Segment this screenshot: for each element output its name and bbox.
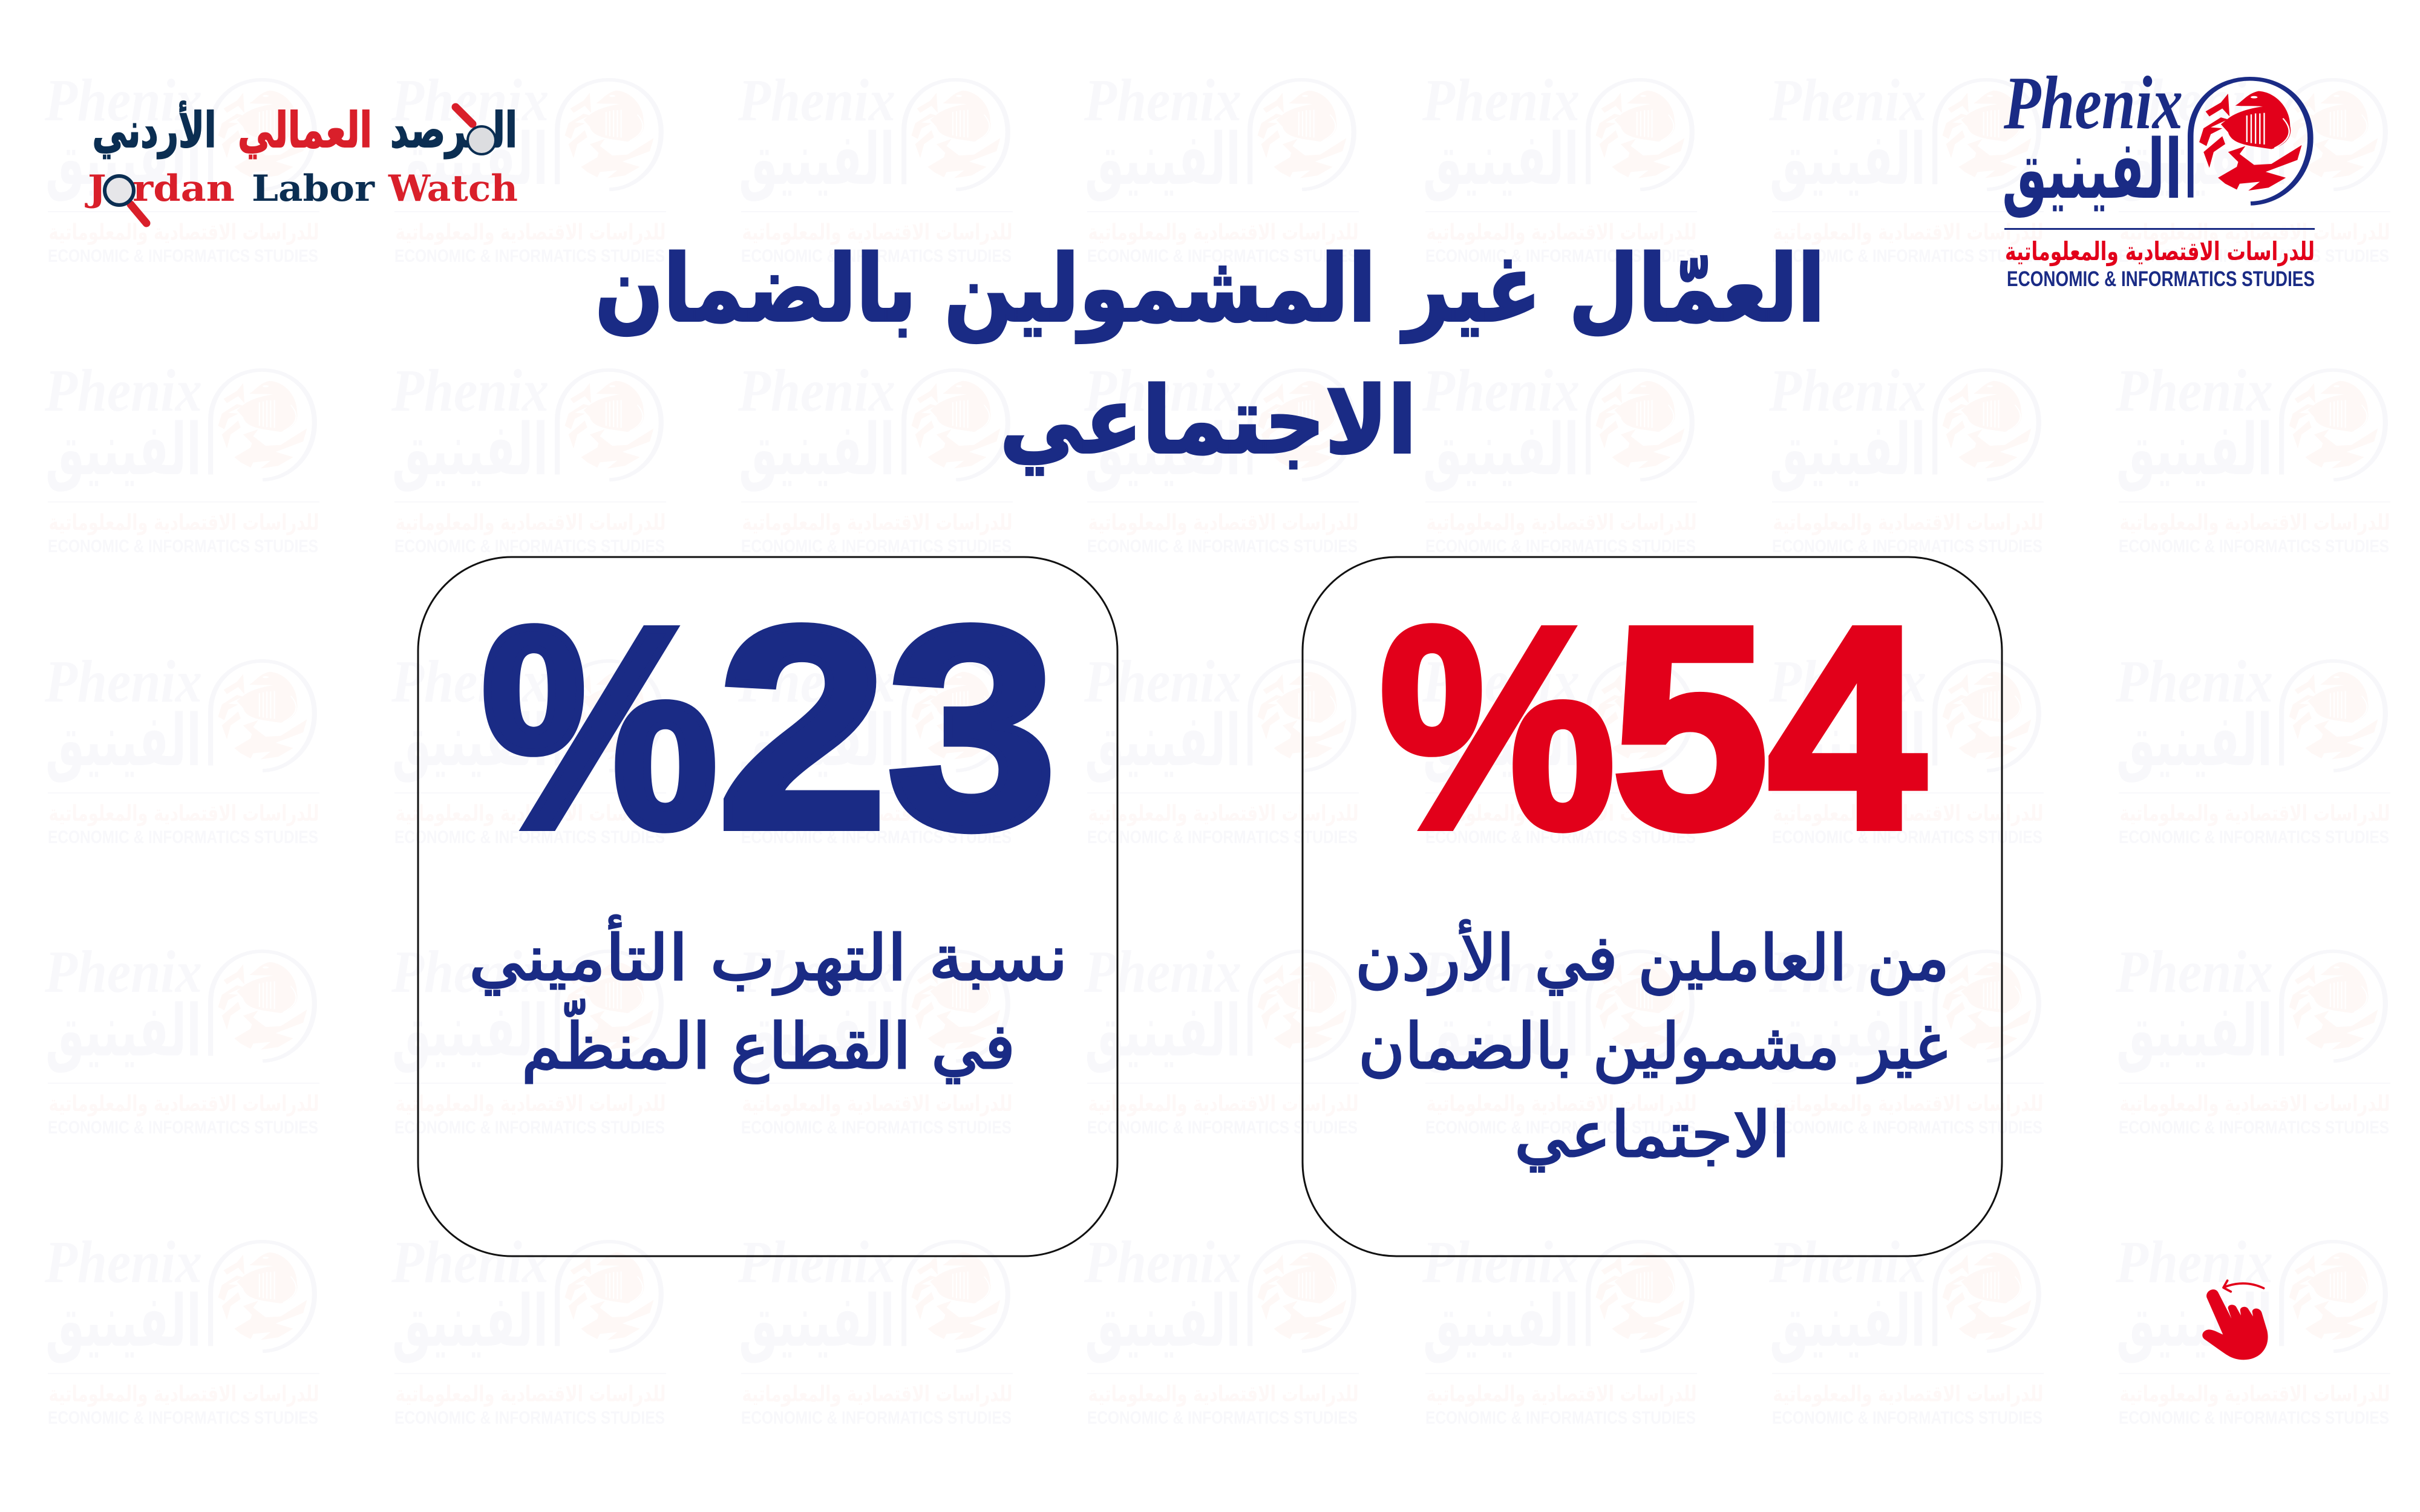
watermark pattern: للدراسات الاقتصادية والمعلوماتية xyxy=(1088,510,1359,535)
title: العمّال غير المشمولين بالضمان xyxy=(595,235,1825,343)
watermark pattern: للدراسات الاقتصادية والمعلوماتية xyxy=(48,801,319,826)
logo Arabic name: الأردني xyxy=(92,101,217,159)
watermark pattern: الفينيق xyxy=(739,408,895,492)
stat: 23 percent xyxy=(481,568,1057,888)
watermark pattern: Phenix xyxy=(1422,1228,1580,1295)
watermark pattern: Phenix xyxy=(391,938,549,1005)
watermark pattern: للدراسات الاقتصادية والمعلوماتية xyxy=(742,801,1013,826)
logo English name: Labor xyxy=(252,168,375,210)
watermark pattern: ECONOMIC & INFORMATICS STUDIES xyxy=(1772,1408,2042,1428)
watermark pattern: Phenix xyxy=(1768,357,1926,424)
stat: 23 percent: 23 xyxy=(718,568,1057,888)
watermark pattern: للدراسات الاقتصادية والمعلوماتية xyxy=(396,510,666,535)
watermark pattern: الفينيق xyxy=(1423,699,1579,783)
text: workers not covered xyxy=(1355,919,1949,1172)
watermark pattern: Phenix xyxy=(391,648,549,715)
watermark pattern: الفينيق xyxy=(739,117,895,201)
watermark pattern: الفينيق xyxy=(2116,408,2272,492)
watermark pattern: ECONOMIC & INFORMATICS STUDIES xyxy=(741,536,1012,556)
watermark pattern: Phenix xyxy=(737,648,895,715)
watermark pattern: للدراسات الاقتصادية والمعلوماتية xyxy=(48,1092,319,1116)
watermark pattern: الفينيق xyxy=(2116,1279,2272,1363)
watermark pattern: الفينيق xyxy=(1085,117,1241,201)
watermark pattern: Phenix xyxy=(44,1228,202,1295)
watermark pattern: Phenix xyxy=(391,67,549,134)
watermark pattern: ECONOMIC & INFORMATICS STUDIES xyxy=(394,1118,665,1138)
watermark pattern: الفينيق xyxy=(392,699,548,783)
watermark pattern: Phenix xyxy=(1768,648,1926,715)
watermark pattern: الفينيق xyxy=(45,989,201,1073)
watermark pattern: الفينيق xyxy=(739,989,895,1073)
watermark pattern: Phenix xyxy=(2115,357,2273,424)
watermark pattern: Phenix xyxy=(1422,938,1580,1005)
watermark pattern: للدراسات الاقتصادية والمعلوماتية xyxy=(1088,1382,1359,1407)
watermark pattern: Phenix xyxy=(1084,938,1241,1005)
watermark pattern: الفينيق xyxy=(1085,408,1241,492)
watermark pattern: ECONOMIC & INFORMATICS STUDIES xyxy=(48,827,318,847)
text: workers not covered: غير مشمولين بالضمان xyxy=(1358,1009,1947,1084)
logo Arabic name xyxy=(92,101,517,159)
watermark pattern: Phenix xyxy=(1768,67,1926,134)
watermark pattern: ECONOMIC & INFORMATICS STUDIES xyxy=(394,536,665,556)
watermark pattern: ECONOMIC & INFORMATICS STUDIES xyxy=(48,1118,318,1138)
icon: swipe hand xyxy=(2202,1280,2268,1360)
text: insurance evasion: نسبة التهرب التأميني xyxy=(469,915,1068,996)
watermark pattern: للدراسات الاقتصادية والمعلوماتية xyxy=(1088,801,1359,826)
watermark pattern: للدراسات الاقتصادية والمعلوماتية xyxy=(396,1382,666,1407)
icon: phoenix emblem xyxy=(2191,79,2310,203)
watermark pattern: للدراسات الاقتصادية والمعلوماتية xyxy=(396,220,666,245)
watermark pattern: Phenix xyxy=(1768,938,1926,1005)
watermark pattern: الفينيق xyxy=(1770,989,1926,1073)
logo: Phenix xyxy=(2002,62,2315,291)
watermark pattern: Phenix xyxy=(1422,67,1580,134)
watermark pattern: الفينيق xyxy=(2116,117,2272,201)
watermark pattern: الفينيق xyxy=(392,117,548,201)
watermark pattern: الفينيق xyxy=(2116,989,2272,1073)
watermark pattern: للدراسات الاقتصادية والمعلوماتية xyxy=(48,510,319,535)
watermark pattern: ECONOMIC & INFORMATICS STUDIES xyxy=(394,246,665,266)
watermark pattern: الفينيق xyxy=(1770,408,1926,492)
watermark pattern: Phenix xyxy=(737,938,895,1005)
watermark pattern: الفينيق xyxy=(1085,989,1241,1073)
watermark pattern: Phenix xyxy=(2115,67,2273,134)
icon: magnifier on Arabic name xyxy=(456,107,495,154)
watermark pattern: Phenix xyxy=(1422,648,1580,715)
logo rule xyxy=(2004,228,2315,230)
watermark pattern: للدراسات الاقتصادية والمعلوماتية xyxy=(1427,220,1697,245)
watermark pattern: ECONOMIC & INFORMATICS STUDIES xyxy=(1087,827,1358,847)
watermark pattern: Phenix xyxy=(1084,357,1241,424)
watermark pattern: الفينيق xyxy=(45,117,201,201)
watermark pattern: للدراسات الاقتصادية والمعلوماتية xyxy=(1088,1092,1359,1116)
watermark pattern: ECONOMIC & INFORMATICS STUDIES xyxy=(48,246,318,266)
icon: magnifier on English name xyxy=(105,176,146,223)
watermark pattern: Phenix xyxy=(44,938,202,1005)
logo English tagline: ECONOMIC & INFORMATICS STUDIES xyxy=(2007,267,2315,291)
watermark pattern: ECONOMIC & INFORMATICS STUDIES xyxy=(741,246,1012,266)
watermark pattern: Phenix xyxy=(44,648,202,715)
watermark pattern: ECONOMIC & INFORMATICS STUDIES xyxy=(1772,1118,2042,1138)
watermark pattern: الفينيق xyxy=(1423,117,1579,201)
watermark pattern: الفينيق xyxy=(1770,1279,1926,1363)
logo Arabic name: المرصد xyxy=(390,102,517,159)
watermark pattern: ECONOMIC & INFORMATICS STUDIES xyxy=(741,1118,1012,1138)
watermark pattern: للدراسات الاقتصادية والمعلوماتية xyxy=(1773,1092,2044,1116)
watermark pattern: ECONOMIC & INFORMATICS STUDIES xyxy=(1425,536,1696,556)
watermark pattern: الفينيق xyxy=(1770,117,1926,201)
watermark pattern: Phenix xyxy=(2115,1228,2273,1295)
watermark pattern: الفينيق xyxy=(45,1279,201,1363)
watermark pattern: للدراسات الاقتصادية والمعلوماتية xyxy=(1773,1382,2044,1407)
logo: Jordan Labor Watch xyxy=(85,101,518,223)
watermark pattern: ECONOMIC & INFORMATICS STUDIES xyxy=(741,827,1012,847)
stat: 23 percent: % xyxy=(481,568,718,888)
watermark pattern: Phenix xyxy=(391,357,549,424)
watermark pattern: ECONOMIC & INFORMATICS STUDIES xyxy=(1772,246,2042,266)
watermark pattern: ECONOMIC & INFORMATICS STUDIES xyxy=(394,827,665,847)
watermark pattern: الفينيق xyxy=(1770,699,1926,783)
watermark pattern: للدراسات الاقتصادية والمعلوماتية xyxy=(742,1092,1013,1116)
watermark pattern: ECONOMIC & INFORMATICS STUDIES xyxy=(1087,1408,1358,1428)
watermark pattern: الفينيق xyxy=(1085,699,1241,783)
stat: 54 percent xyxy=(1379,568,1927,888)
watermark pattern: للدراسات الاقتصادية والمعلوماتية xyxy=(1773,220,2044,245)
watermark pattern: Phenix xyxy=(44,357,202,424)
watermark pattern: Phenix xyxy=(1084,67,1241,134)
watermark pattern: Phenix xyxy=(2115,648,2273,715)
watermark pattern: للدراسات الاقتصادية والمعلوماتية xyxy=(1427,1382,1697,1407)
watermark pattern: Phenix xyxy=(2115,938,2273,1005)
watermark pattern: للدراسات الاقتصادية والمعلوماتية xyxy=(48,220,319,245)
watermark pattern: ECONOMIC & INFORMATICS STUDIES xyxy=(394,1408,665,1428)
stat: 54 percent: % xyxy=(1379,568,1615,888)
watermark pattern: ECONOMIC & INFORMATICS STUDIES xyxy=(741,1408,1012,1428)
watermark pattern: الفينيق xyxy=(392,989,548,1073)
text: workers not covered: الاجتماعي xyxy=(1514,1098,1790,1172)
text: workers not covered: من العاملين في الأردن xyxy=(1355,919,1949,996)
watermark pattern: ECONOMIC & INFORMATICS STUDIES xyxy=(1087,1118,1358,1138)
watermark pattern: ECONOMIC & INFORMATICS STUDIES xyxy=(1425,1408,1696,1428)
text: insurance evasion: في القطاع المنظّم xyxy=(522,1000,1015,1084)
logo wordmark Arabic: الفينيق xyxy=(2002,122,2182,218)
logo Arabic name: العمالي xyxy=(238,102,372,158)
watermark pattern: Phenix xyxy=(1084,1228,1241,1295)
watermark pattern: للدراسات الاقتصادية والمعلوماتية xyxy=(48,1382,319,1407)
watermark pattern: ECONOMIC & INFORMATICS STUDIES xyxy=(1772,536,2042,556)
watermark pattern: للدراسات الاقتصادية والمعلوماتية xyxy=(1773,801,2044,826)
watermark pattern: الفينيق xyxy=(45,408,201,492)
panel: 23 percent xyxy=(418,557,1117,1256)
watermark pattern: الفينيق xyxy=(739,1279,895,1363)
title: الاجتماعي xyxy=(999,367,1417,475)
logo English name: Jordan xyxy=(85,168,235,210)
watermark pattern: Phenix xyxy=(44,67,202,134)
logo wordmark Phenix: Phenix xyxy=(2003,62,2183,145)
watermark pattern: ECONOMIC & INFORMATICS STUDIES xyxy=(48,536,318,556)
watermark pattern: للدراسات الاقتصادية والمعلوماتية xyxy=(742,510,1013,535)
watermark pattern: ECONOMIC & INFORMATICS STUDIES xyxy=(1425,1118,1696,1138)
watermark pattern: للدراسات الاقتصادية والمعلوماتية xyxy=(396,801,666,826)
watermark pattern: الفينيق xyxy=(1423,989,1579,1073)
watermark pattern: Phenix xyxy=(1422,357,1580,424)
watermark pattern: الفينيق xyxy=(1085,1279,1241,1363)
watermark pattern: Phenix xyxy=(737,1228,895,1295)
watermark pattern: ECONOMIC & INFORMATICS STUDIES xyxy=(1087,536,1358,556)
watermark pattern: الفينيق xyxy=(739,699,895,783)
watermark pattern: للدراسات الاقتصادية والمعلوماتية xyxy=(742,1382,1013,1407)
watermark pattern: الفينيق xyxy=(392,1279,548,1363)
watermark pattern: للدراسات الاقتصادية والمعلوماتية xyxy=(396,1092,666,1116)
watermark pattern: ECONOMIC & INFORMATICS STUDIES xyxy=(1087,246,1358,266)
watermark pattern: الفينيق xyxy=(1423,1279,1579,1363)
logo English name: Watch xyxy=(388,168,518,210)
panel: 54 percent xyxy=(1303,557,2002,1256)
watermark pattern: ECONOMIC & INFORMATICS STUDIES xyxy=(1425,827,1696,847)
watermark pattern: للدراسات الاقتصادية والمعلوماتية xyxy=(1427,1092,1697,1116)
watermark pattern: للدراسات الاقتصادية والمعلوماتية xyxy=(1773,510,2044,535)
watermark pattern: ECONOMIC & INFORMATICS STUDIES xyxy=(1772,827,2042,847)
stat: 54 percent: 54 xyxy=(1612,568,1927,888)
title xyxy=(595,235,1825,475)
watermark pattern: Phenix xyxy=(737,357,895,424)
watermark pattern: ECONOMIC & INFORMATICS STUDIES xyxy=(1425,246,1696,266)
watermark pattern: Phenix xyxy=(1084,648,1241,715)
text: insurance evasion xyxy=(469,915,1068,1084)
watermark pattern: للدراسات الاقتصادية والمعلوماتية xyxy=(1088,220,1359,245)
watermark pattern: للدراسات الاقتصادية والمعلوماتية xyxy=(1427,801,1697,826)
watermark pattern: الفينيق xyxy=(45,699,201,783)
watermark pattern: الفينيق xyxy=(2116,699,2272,783)
watermark pattern: Phenix xyxy=(737,67,895,134)
watermark pattern: Phenix xyxy=(391,1228,549,1295)
watermark pattern: للدراسات الاقتصادية والمعلوماتية xyxy=(742,220,1013,245)
watermark pattern: للدراسات الاقتصادية والمعلوماتية xyxy=(1427,510,1697,535)
logo Arabic tagline: للدراسات الاقتصادية والمعلوماتية xyxy=(2005,236,2315,267)
logo English name xyxy=(85,168,518,210)
watermark pattern: ECONOMIC & INFORMATICS STUDIES xyxy=(48,1408,318,1428)
watermark pattern: الفينيق xyxy=(392,408,548,492)
watermark pattern: الفينيق xyxy=(1423,408,1579,492)
watermark pattern: Phenix xyxy=(1768,1228,1926,1295)
